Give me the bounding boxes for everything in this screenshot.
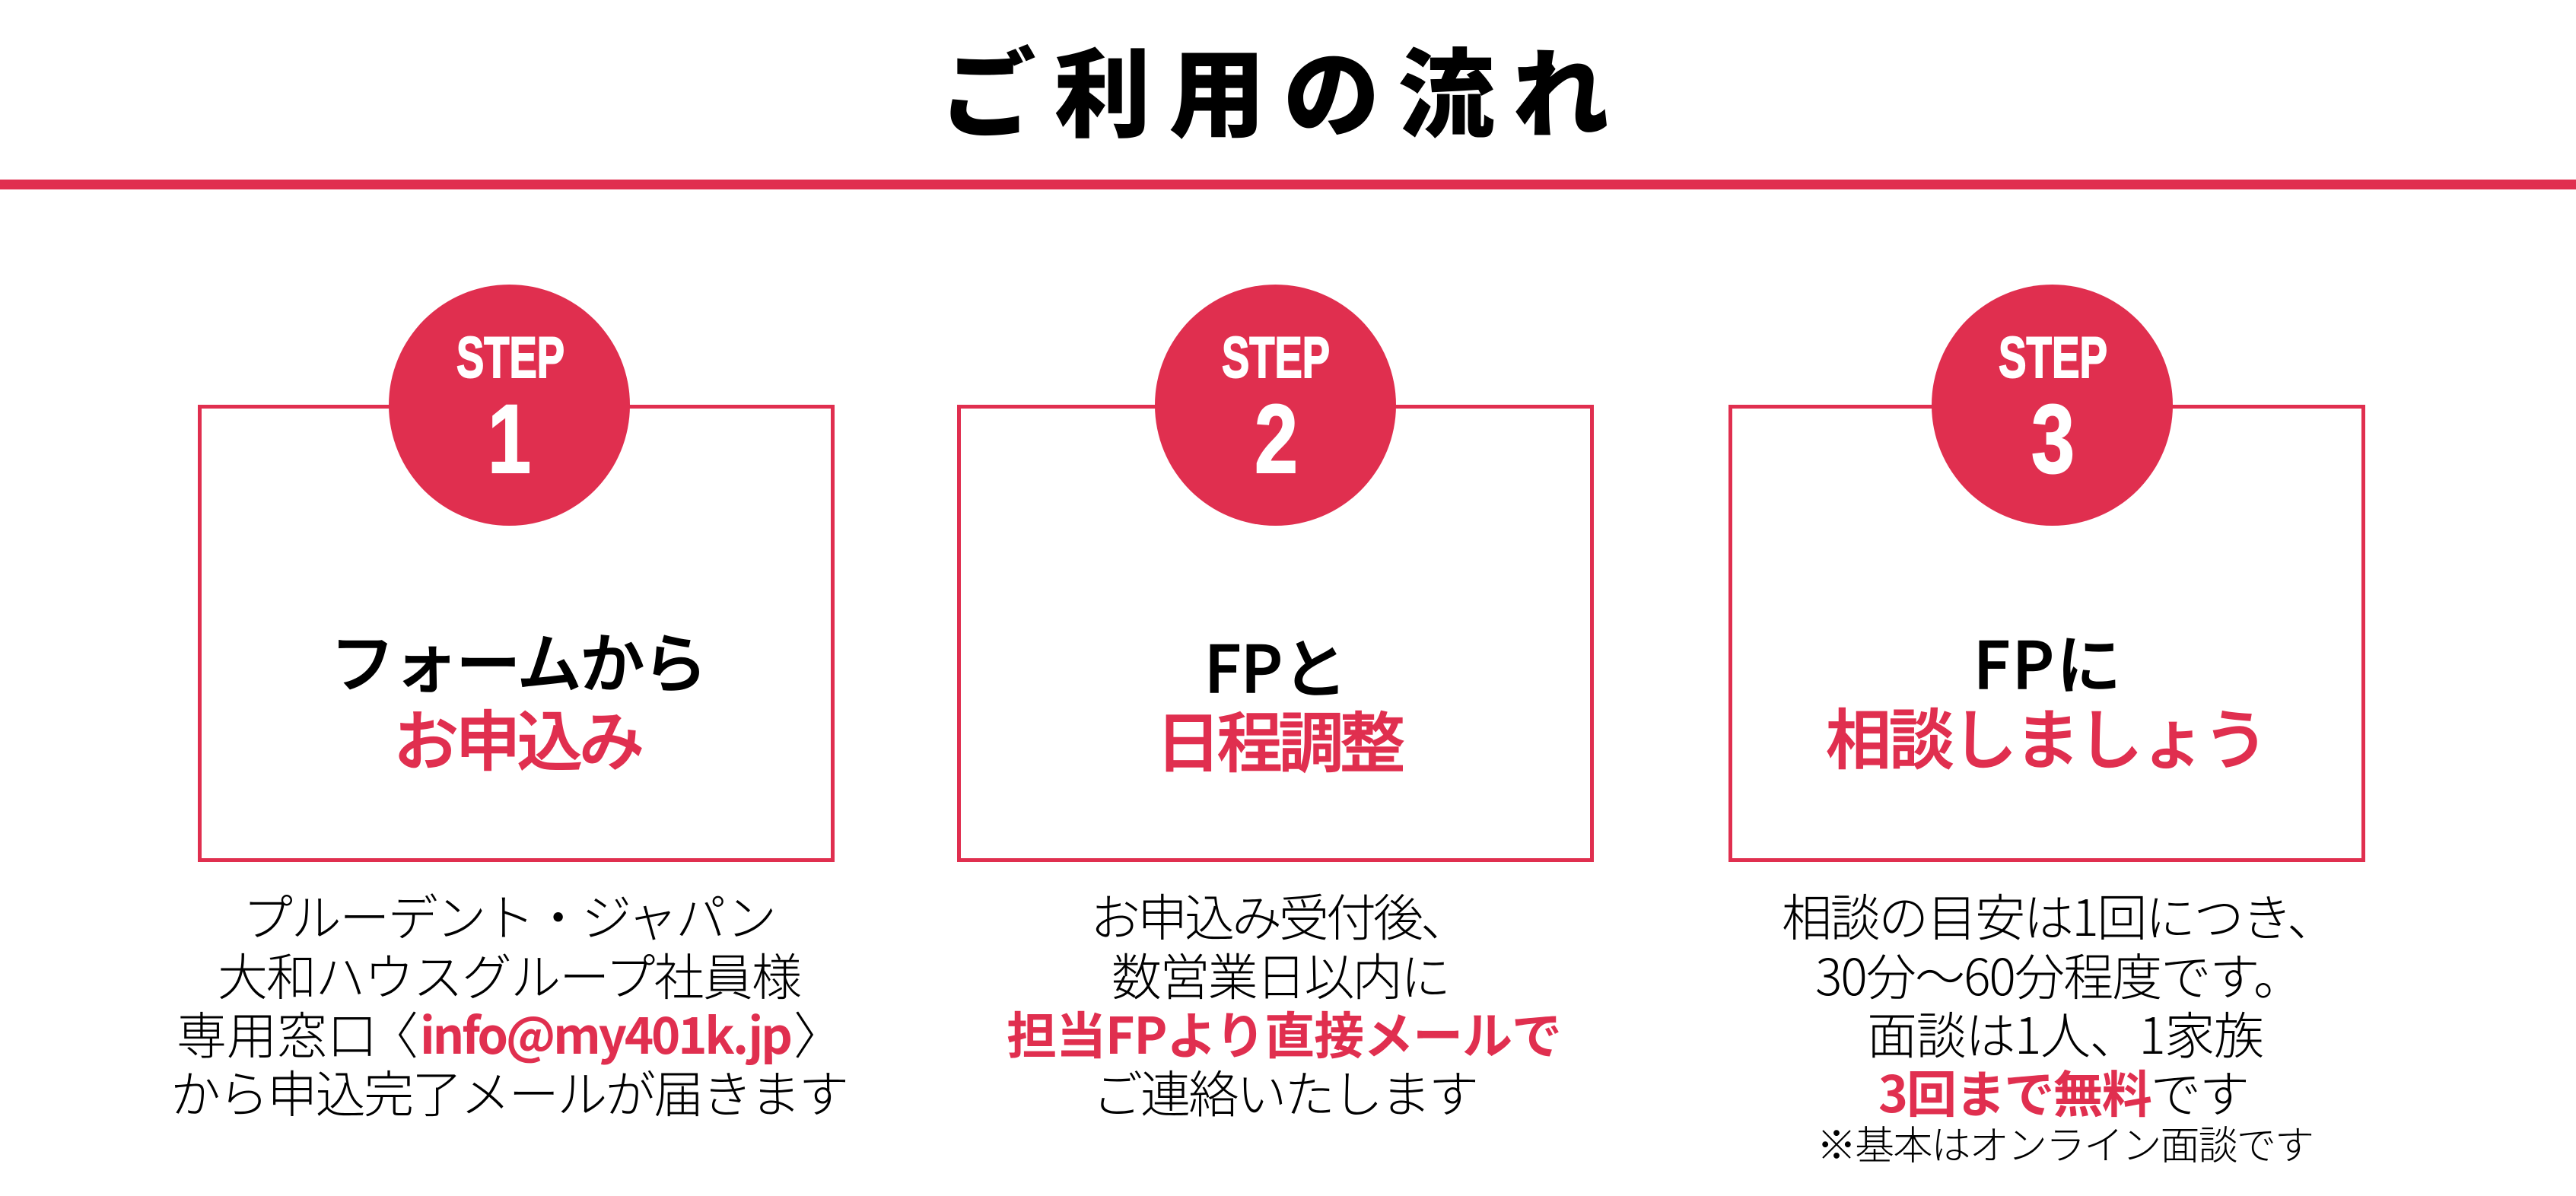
step 1 badge [389,285,630,526]
panel: step 3 [1730,285,2363,1171]
title: ご利用の流れ [940,17,1609,157]
step 1 heading [330,612,708,784]
step 2 badge: STEP [1222,326,1330,390]
step 2 description: お申込み受付後、 [1090,878,1471,951]
step 1 description: 〈 [368,996,418,1069]
step 1 description: から申込完了メールが届きます [170,1054,849,1128]
step 3 description: ※基本はオンライン面談です [1817,1114,2314,1171]
step 1 description: info@my401k.jp [420,997,793,1068]
step 3 heading: FPに [1973,614,2121,708]
step 2 heading: 日程調整 [1156,690,1405,785]
step 3 description [1782,878,2337,1171]
step 2 box [959,406,1592,860]
step 2 badge: 2 [1255,385,1298,494]
step 2 badge [1155,285,1396,526]
step 1 heading: フォームから [330,612,708,706]
step 1 badge: STEP [456,326,564,390]
step 1 heading: お申込み [393,689,644,784]
step 2 heading [1156,618,1405,785]
step 3 box [1730,406,2363,860]
step 1 description: 大和ハウスグループ社員様 [218,937,802,1010]
step 3 badge: STEP [1999,326,2107,390]
red title rule [0,180,2576,189]
step 2 description: 担当FPより直接メールで [1007,996,1562,1069]
step 1 badge: 1 [488,385,531,494]
step 3 description: 3回まで無料です [1878,1054,2250,1128]
panel: step 2 [959,285,1592,1128]
step 1 description: 〉 [793,996,844,1069]
step 3 badge [1932,285,2173,526]
step 3 description: 面談は1人、1家族 [1867,996,2264,1069]
step 2 description: ご連絡いたします [1092,1054,1479,1128]
step 2 description: 数営業日以内に [1111,937,1451,1010]
step 3 badge: 3 [2031,385,2075,494]
step 1 description: 専用窓口 [177,996,377,1069]
step 3 description: 相談の目安は1回につき、 [1782,878,2337,951]
step 2 heading: FPと [1204,618,1347,711]
step 1 description: プルーデント・ジャパン [243,878,777,951]
panel: step 1 [170,285,849,1128]
step 3 heading [1826,614,2269,782]
step 2 description [1007,878,1562,1128]
step 1 box [199,406,832,860]
step 3 description: 30分～60分程度です。 [1815,937,2304,1010]
step 1 description [170,878,849,1128]
step 3 heading: 相談しましょう [1826,687,2269,782]
